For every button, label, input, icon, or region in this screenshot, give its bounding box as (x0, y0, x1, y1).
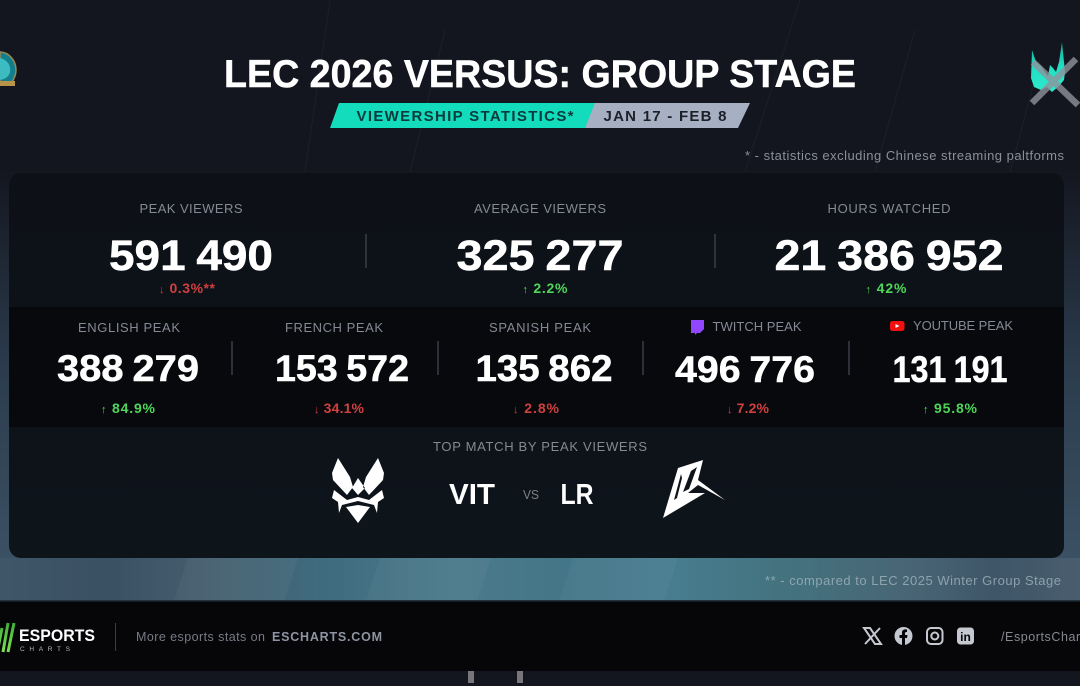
logo: Team Vitality (332, 458, 384, 523)
icon: facebook (894, 627, 912, 645)
top match (332, 439, 725, 523)
icon: youtube (890, 321, 904, 331)
stat: english peak: ↑ 84.9% (101, 400, 156, 416)
stat: average viewers: AVERAGE VIEWERS (474, 201, 606, 216)
stat: youtube peak: ↑ 95.8% (923, 400, 978, 416)
icon: twitch (691, 320, 704, 335)
stat: french peak: FRENCH PEAK (285, 320, 383, 335)
title: LEC 2026 VERSUS: GROUP STAGE (224, 53, 856, 96)
LEC logo crossed out (1031, 42, 1078, 105)
stat: youtube peak: YOUTUBE PEAK (913, 318, 1013, 333)
stat: french peak: 153 572 (275, 348, 409, 389)
stat: french peak (275, 320, 409, 416)
league of legends logo (0, 52, 16, 86)
subtitle banner: viewership statistics: VIEWERSHIP STATISTICS* (356, 108, 574, 125)
heading: top match: TOP MATCH BY PEAK VIEWERS (433, 439, 647, 454)
stat: english peak: ENGLISH PEAK (78, 320, 180, 335)
stat: hours watched (774, 201, 1004, 296)
icon: instagram (927, 628, 942, 644)
link text: More esports stats on (136, 630, 265, 644)
stat: average viewers: 325 277 (456, 232, 624, 280)
logo: esports charts (0, 623, 95, 653)
stat: youtube peak: 131 191 (892, 349, 1008, 390)
stat: youtube peak (890, 318, 1013, 416)
date banner: JAN 17 - FEB 8 (604, 108, 726, 125)
stat: english peak (57, 320, 199, 416)
footer (0, 600, 1080, 671)
footnote: statistics: * - statistics excluding Chinese streaming paltforms (745, 148, 1064, 163)
versus: VS (523, 487, 539, 502)
stat: peak viewers: 591 490 (109, 232, 273, 280)
stat: hours watched: HOURS WATCHED (828, 201, 950, 216)
stat: twitch peak: 496 776 (675, 349, 815, 390)
stat: spanish peak: 135 862 (476, 348, 612, 389)
panel: main statistics (9, 173, 1064, 558)
stat: twitch peak (675, 319, 815, 416)
link text (136, 630, 382, 644)
stat: hours watched: ↑ 42% (866, 280, 907, 296)
logo: Los Ratones (663, 460, 725, 518)
date banner (585, 103, 750, 128)
stat: average viewers: ↑ 2.2% (522, 280, 568, 296)
team: LR: LR (560, 479, 594, 511)
bottom marks (468, 671, 523, 683)
link text: ESCHARTS.COM (272, 630, 382, 644)
team: VIT: VIT (449, 479, 495, 511)
stat: hours watched: 21 386 952 (774, 232, 1004, 280)
stat: spanish peak (476, 320, 612, 416)
stat: peak viewers: ↓ 0.3%** (159, 280, 216, 296)
stat: english peak: 388 279 (57, 348, 199, 389)
stat: spanish peak: SPANISH PEAK (489, 320, 591, 335)
icon: linkedin (957, 628, 974, 644)
stat: twitch peak: TWITCH PEAK (712, 319, 802, 334)
subtitle banner: viewership statistics (330, 103, 596, 128)
stat: peak viewers (109, 201, 273, 296)
band: platform and language peaks (9, 307, 1064, 427)
icon: x (864, 628, 881, 644)
stat: twitch peak: ↓ 7.2% (727, 400, 770, 416)
stat: spanish peak: ↓ 2.8% (513, 400, 560, 416)
icon: linkedin: in (960, 630, 971, 644)
stat: peak viewers: PEAK VIEWERS (140, 201, 243, 216)
stat: french peak: ↓ 34.1% (314, 400, 365, 416)
logo: esports charts: ESPORTS (19, 627, 95, 645)
stat: average viewers (456, 201, 624, 296)
footnote: comparison: ** - compared to LEC 2025 Winter Group Stage (765, 573, 1061, 588)
logo: esports charts: CHARTS (20, 646, 71, 653)
